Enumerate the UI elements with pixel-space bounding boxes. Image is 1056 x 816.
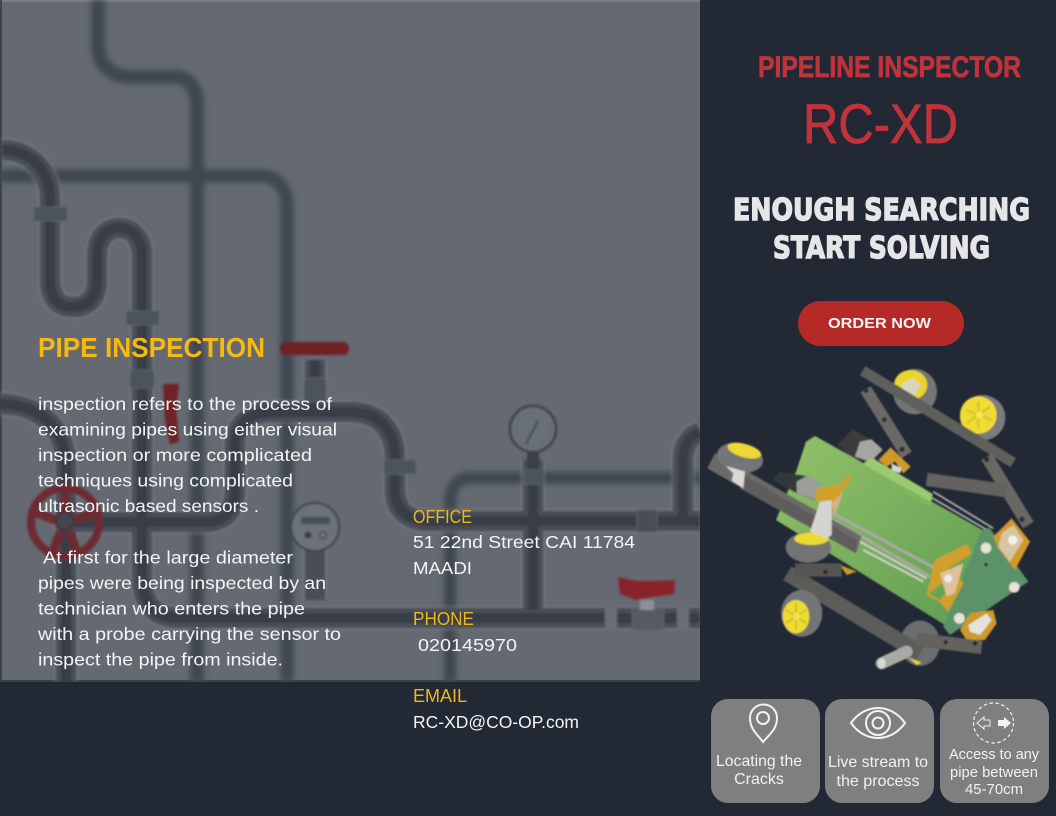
text block: inspection description: technician who enters the pipe [38, 598, 305, 618]
slogan: START SOLVING [773, 231, 990, 266]
bottom bracket [960, 610, 997, 640]
title: RC-XD: RC-XD [803, 92, 958, 155]
text block: inspection description: ultrasonic based sensors . [38, 496, 259, 516]
shaft cylinder [882, 652, 907, 663]
upper wheel left [893, 369, 937, 414]
feature card: access to any pipe [940, 699, 1049, 803]
text block: inspection description: inspect the pipe from inside. [38, 650, 283, 670]
contact: phone: PHONE [413, 609, 474, 629]
feature card: access to any pipe: Access to any [949, 747, 1040, 763]
contact: office: MAADI [413, 558, 472, 578]
gauge: meter [291, 503, 339, 551]
bottom frame [787, 570, 982, 653]
button: order now [798, 301, 964, 346]
upper arms [863, 371, 1028, 532]
text block: inspection description: inspection or more complicated [38, 445, 312, 465]
text block: inspection description [37, 394, 341, 670]
feature card: live stream: Live stream to [828, 754, 928, 771]
left yellow bracket [815, 475, 852, 515]
contact: phone [413, 609, 517, 655]
text block: inspection description: examining pipes using either visual [38, 420, 337, 440]
middle wheel [786, 532, 831, 563]
middle motor [773, 472, 822, 500]
contact: email [413, 686, 579, 732]
left wheel [714, 438, 766, 488]
text block: inspection description: pipes were being inspected by an [38, 573, 326, 593]
feature card: access to any pipe: pipe between [950, 765, 1038, 781]
rear motor [837, 429, 883, 463]
top bracket [878, 447, 911, 473]
contact: phone: 020145970 [418, 635, 517, 655]
feature card: live stream [825, 699, 934, 803]
feature card: access to any pipe: 45-70cm [965, 782, 1023, 798]
contact: office: OFFICE [413, 507, 472, 527]
valve: butterfly left [163, 384, 179, 444]
green end plate [943, 528, 1028, 635]
contact: email: RC-XD@CO-OP.com [413, 712, 579, 732]
silver clamp [810, 500, 832, 538]
pipe fittings [34, 207, 689, 632]
left arm [707, 453, 862, 553]
bottom rear wheel [900, 621, 940, 666]
feature card: locating the cracks: Cracks [734, 771, 784, 788]
upper wheel right [960, 395, 1005, 440]
text block: inspection description: inspection refers to the process of [38, 394, 332, 414]
right bracket with pad [927, 544, 972, 612]
upper-right bracket [993, 518, 1030, 570]
icon: location pin [750, 704, 777, 742]
blurred pipes [0, 0, 700, 682]
icon: dashed circle arrows [974, 703, 1014, 743]
feature card: locating the cracks: Locating the [716, 753, 802, 770]
contact: office: 51 22nd Street CAI 11784 [413, 532, 635, 552]
text block: inspection description: with a probe carrying the sensor to [37, 624, 341, 644]
contact: office [413, 507, 635, 578]
slogan [733, 193, 1030, 266]
panel: pipes background [0, 0, 700, 682]
gauge: pressure [510, 406, 556, 466]
icon: eye [851, 708, 905, 738]
rods [827, 510, 938, 577]
green body [776, 436, 983, 625]
valve: butterfly right [618, 577, 675, 610]
robot illustration [707, 369, 1030, 669]
contact: email: EMAIL [413, 686, 467, 706]
heading: pipe inspection: PIPE INSPECTION [38, 332, 265, 363]
bottom-left wheel [781, 590, 822, 637]
sharp pipes [0, 150, 700, 682]
feature card: live stream: the process [836, 773, 920, 790]
valve: red wheel [31, 488, 99, 556]
text block: inspection description: techniques using complicated [38, 470, 293, 490]
button: order now: ORDER NOW [828, 315, 932, 332]
feature card: locating the cracks [711, 699, 820, 803]
text block: inspection description: At first for the large diameter [43, 548, 293, 568]
valve: top red handle [280, 342, 349, 355]
